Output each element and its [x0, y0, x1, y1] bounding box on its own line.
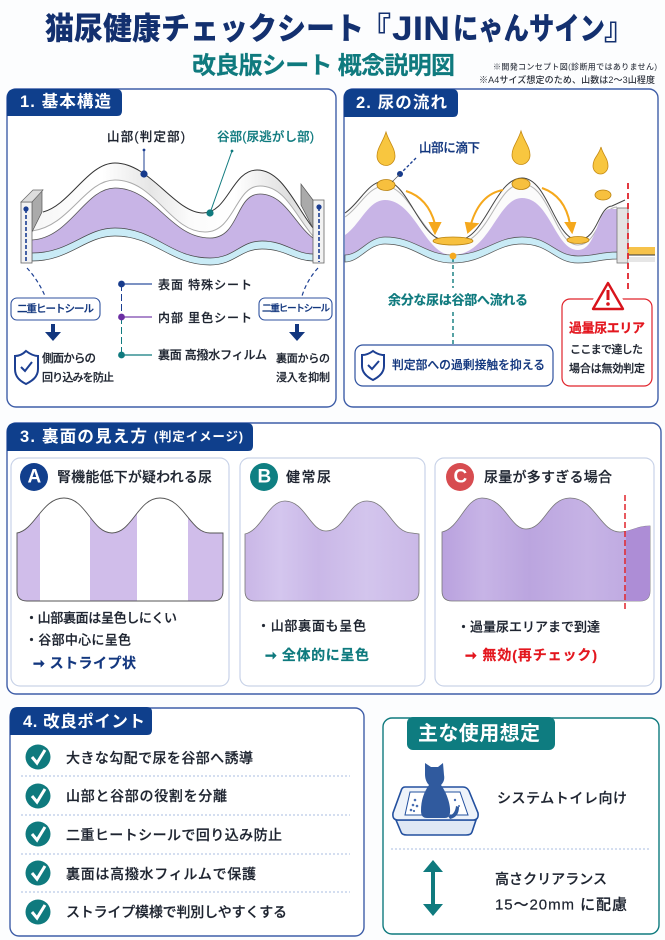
- heat seal label left: [11, 298, 100, 320]
- callout: suppress contact: [355, 345, 553, 386]
- stripe chart A: [17, 495, 223, 603]
- panel: 2 urine flow: [344, 89, 658, 407]
- text B: [257, 618, 369, 663]
- text: back protection: 裏面からの: [276, 351, 330, 365]
- point 5: ストライプ模様で判別しやすくする: [66, 904, 287, 920]
- text C: [457, 620, 600, 663]
- text: side protection: [42, 352, 114, 384]
- heading: 3: 3. 裏面の見え方: [20, 426, 147, 446]
- heading: 4: [10, 707, 152, 735]
- over-limit chart C: [442, 495, 650, 612]
- text: back protection: [276, 351, 330, 384]
- title: 猫尿健康チェックシート: [45, 12, 364, 46]
- heading: 3: (判定イメージ): [154, 429, 243, 444]
- full color chart B: [245, 501, 419, 601]
- heading: 1: 1. 基本構造: [20, 92, 112, 111]
- text C: ➞ 無効(再チェック): [465, 647, 597, 663]
- text: height clearance: [495, 871, 627, 914]
- dashed leader left: [27, 268, 45, 296]
- point 3: 二重ヒートシールで回り込み防止: [66, 827, 282, 843]
- heading: 2: 2. 尿の流れ: [356, 93, 448, 112]
- card B: [240, 458, 425, 686]
- layer legend: [118, 277, 267, 362]
- text: system toilet: システムトイレ向け: [497, 790, 627, 806]
- text: side protection: 側面からの: [42, 352, 96, 365]
- heat seal block left: [21, 190, 43, 263]
- note text: [479, 62, 657, 85]
- point 1: [26, 744, 253, 770]
- heading: usage: [407, 717, 555, 750]
- urine puddles: [377, 178, 611, 245]
- heading B: 健常尿: [286, 469, 331, 485]
- callout: excess urine area: [562, 282, 652, 386]
- wave sheet cross-section: [345, 178, 655, 263]
- layer legend: 裏面 高撥水フィルム: [158, 347, 267, 362]
- heat seal label right: 二重ヒートシール: [262, 302, 330, 314]
- text: excess flow: 余分な尿は谷部へ流れる: [388, 292, 528, 308]
- divider: [391, 848, 650, 850]
- title: [45, 10, 635, 48]
- arrow down right: [289, 324, 305, 341]
- wave sheet cross-section: [32, 163, 313, 265]
- badge B: B: [258, 466, 271, 488]
- badge C: [446, 463, 474, 491]
- text: height clearance: 15〜20mm に配慮: [495, 896, 627, 914]
- valley marker: [450, 253, 456, 344]
- text: back protection: 浸入を抑制: [276, 370, 330, 384]
- subtitle: 改良版シート 概念説明図: [192, 52, 455, 80]
- title: JIN: [392, 10, 450, 48]
- callout: excess urine area: 過量尿エリア: [569, 320, 645, 336]
- callout: excess urine area: 場合は無効判定: [569, 361, 645, 375]
- note text: ※A4サイズ想定のため、山数は2〜3山程度: [479, 74, 655, 85]
- callout: excess urine area: ここまで達した: [570, 342, 643, 356]
- panel: 3 back appearance: [7, 423, 661, 694]
- drip label: 山部に滴下: [419, 140, 480, 155]
- text A: ・谷部中心に呈色: [25, 632, 131, 648]
- icon: urine drops: [377, 131, 608, 174]
- panel: usage: [383, 717, 659, 934]
- icon: shield: [15, 351, 38, 384]
- dashed leader right: [302, 268, 318, 296]
- heat seal label right: [259, 298, 332, 320]
- heading: 3: [7, 423, 253, 451]
- heading: 4: 4. 改良ポイント: [23, 711, 145, 731]
- dividers: [21, 776, 350, 892]
- title: 』: [604, 12, 635, 46]
- title: 『: [360, 12, 391, 46]
- heading: 1: [7, 89, 122, 116]
- title: にゃんサイン: [453, 12, 605, 46]
- heading C: 尿量が多すぎる場合: [484, 469, 612, 485]
- card C: [435, 458, 654, 686]
- arrow down left: [45, 324, 61, 341]
- flow arrows: [406, 188, 575, 233]
- text B: ➞ 全体的に呈色: [265, 647, 369, 663]
- callout: suppress contact: 判定部への過剰接触を抑える: [392, 358, 545, 372]
- badge A: A: [28, 466, 42, 488]
- point 5: [26, 900, 287, 924]
- label: mountain: 山部(判定部): [107, 129, 185, 144]
- panel: 4 improvement points: [10, 707, 364, 936]
- text: height clearance: 高さクリアランス: [495, 871, 607, 887]
- text A: ➞ ストライプ状: [33, 655, 136, 671]
- heading A: 腎機能低下が疑われる尿: [57, 469, 212, 485]
- card A: [11, 458, 229, 686]
- icon: cat on litter tray: [393, 763, 478, 835]
- badge A: [20, 463, 48, 491]
- text B: ・山部裏面も呈色: [257, 618, 366, 634]
- red dashed limit line: [627, 183, 629, 289]
- valley pointer: [206, 150, 233, 217]
- layer legend: 内部 里色シート: [158, 310, 252, 325]
- point 3: [26, 822, 282, 846]
- note text: ※開発コンセプト図(診断用ではありません): [493, 62, 657, 72]
- heading: usage: 主な使用想定: [418, 722, 540, 745]
- point 4: 裏面は高撥水フィルムで保護: [66, 866, 256, 882]
- mountain pointer: [140, 149, 148, 178]
- heading: 2: [344, 89, 458, 117]
- text A: ・山部裏面は呈色しにくい: [25, 610, 177, 626]
- label: valley: 谷部(尿逃がし部): [217, 129, 314, 144]
- drip label: [392, 140, 480, 182]
- panel: 1 basic structure: [7, 89, 336, 407]
- badge C: C: [454, 466, 468, 488]
- text: side protection: 回り込みを防止: [42, 370, 114, 384]
- badge B: [250, 463, 278, 491]
- text A: [25, 610, 177, 671]
- point 2: 山部と谷部の役割を分離: [66, 788, 227, 804]
- text C: ・過量尿エリアまで到達: [457, 620, 600, 634]
- layer legend: 表面 特殊シート: [158, 277, 252, 292]
- point 2: [26, 784, 227, 808]
- point 4: [26, 860, 256, 886]
- point 1: 大きな勾配で尿を谷部へ誘導: [66, 750, 253, 766]
- heat seal block right: [301, 184, 324, 263]
- heat seal label left: 二重ヒートシール: [17, 302, 94, 315]
- icon: height arrow: [423, 860, 443, 916]
